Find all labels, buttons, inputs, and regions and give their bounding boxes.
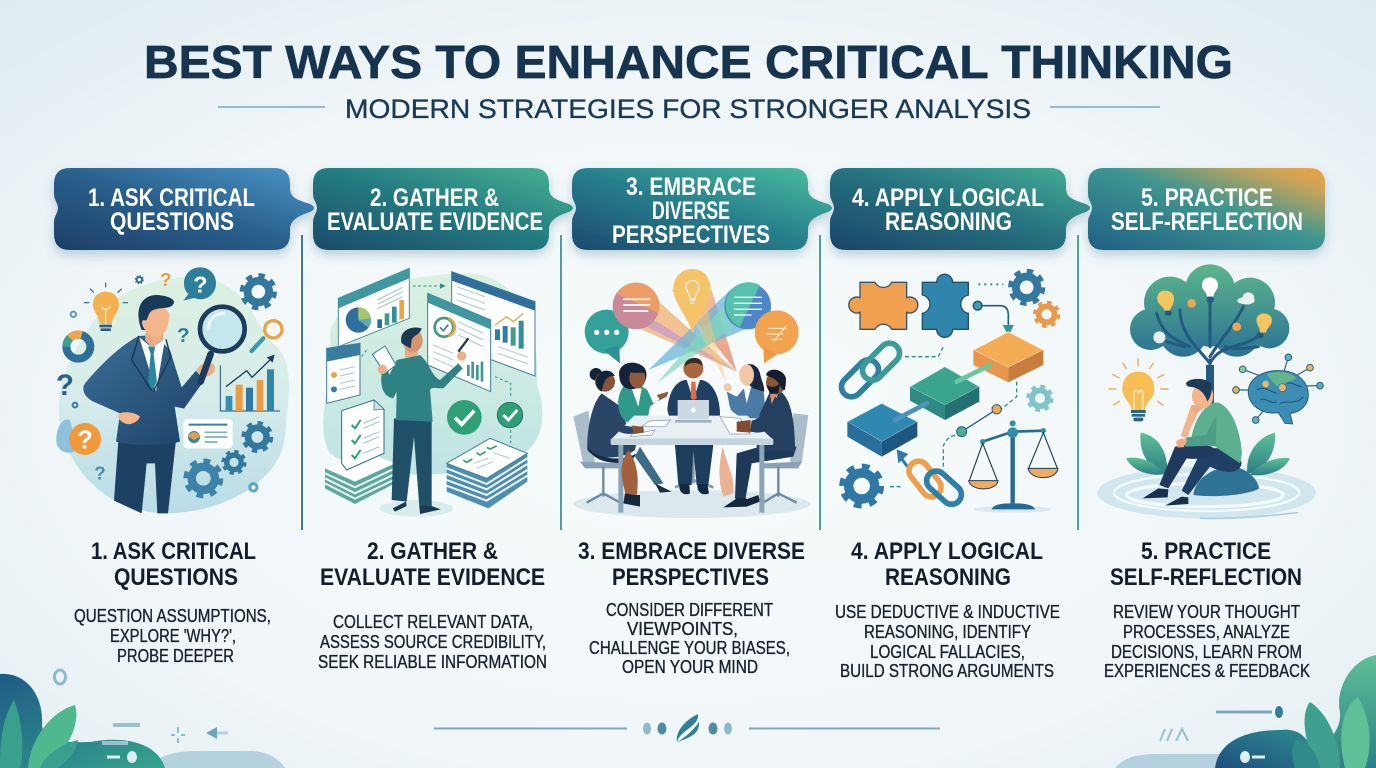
figure: businessman: [83, 295, 215, 513]
icon: gears: [842, 271, 1059, 506]
figure: man pointing at board: [372, 327, 468, 514]
header banner 3: [572, 168, 832, 250]
header banner 5: SELF-REFLECTION: [1111, 208, 1303, 236]
icon: orange puzzle piece: [849, 282, 918, 329]
step 4 text block: 4. APPLY LOGICAL: [851, 538, 1043, 565]
step 3 text block: OPEN YOUR MIND: [622, 657, 758, 677]
bar chart: [220, 355, 280, 411]
icon: scattered question marks: [56, 269, 190, 483]
subtitle: MODERN STRATEGIES FOR STRONGER ANALYSIS: [345, 94, 1031, 124]
step 4 text block: REASONING, IDENTIFY: [864, 622, 1031, 642]
figure: bearded man right: [723, 370, 797, 507]
step 4 text block: USE DEDUCTIVE & INDUCTIVE: [835, 602, 1060, 622]
illustration 3: diverse team meeting: [573, 269, 810, 518]
connector arrow: [973, 301, 1014, 336]
icon: left paper stack with checklist: [325, 400, 395, 504]
speech bubble: orange: [755, 310, 799, 363]
step 5 text block: SELF-REFLECTION: [1110, 564, 1302, 591]
block: green: [910, 365, 990, 420]
icon: magnifying glass: [200, 307, 245, 382]
dashboard window: rear chart: [452, 272, 535, 376]
step 2 text block: COLLECT RELEVANT DATA,: [333, 612, 533, 632]
step 3 text block: CHALLENGE YOUR BIASES,: [589, 638, 790, 658]
water ripples: [1097, 467, 1316, 519]
step 5 text block: [1104, 538, 1310, 681]
step 1 text block: EXPLORE 'WHY?',: [110, 626, 236, 646]
chairs: [573, 411, 808, 503]
icon: glowing bulb: [1108, 358, 1168, 421]
header banner 1: 1. ASK CRITICAL: [88, 184, 255, 212]
step 4 text block: LOGICAL FALLACIES,: [870, 642, 1025, 662]
step 3 text block: VIEWPOINTS,: [627, 619, 738, 639]
tree: [1130, 264, 1289, 405]
icon: scattered question marks: ?: [160, 269, 171, 290]
decoration: bottom right foliage: [1115, 655, 1376, 768]
step 3 text block: [578, 538, 805, 677]
icon: callout card: [183, 419, 233, 448]
icon: small orange magnifier: [252, 321, 282, 351]
dashboard window: pie and bars: [338, 268, 409, 347]
icon: orange question circle: [56, 420, 101, 455]
step 2 text block: [318, 538, 547, 672]
header banner 5: 5. PRACTICE: [1141, 184, 1273, 212]
title: BEST WAYS TO ENHANCE CRITICAL THINKING: [144, 36, 1233, 88]
icon: question bubble: ?: [193, 271, 207, 297]
illustration 1: man with magnifying glass: [56, 267, 289, 513]
header banner 2: [313, 168, 573, 250]
icon: orange question circle: ?: [77, 424, 93, 454]
dashboard window: checklist report: [428, 293, 491, 392]
step 4 text block: [835, 538, 1060, 681]
speech bubble: idea bulb: [673, 269, 711, 333]
step 5 text block: PROCESSES, ANALYZE: [1123, 622, 1290, 642]
icon: balance scale: [969, 420, 1058, 513]
step 4 text block: REASONING: [885, 564, 1011, 591]
figure: forearms and legs in front of table: [595, 397, 790, 507]
step 1 text block: PROBE DEEPER: [117, 646, 234, 666]
illustration 2: evaluating data dashboards: [323, 268, 542, 517]
table with laptop and papers: [611, 400, 773, 513]
header banner 3: PERSPECTIVES: [612, 221, 770, 249]
figure: thinking man: [1143, 379, 1242, 506]
header banner 5: [1088, 168, 1325, 250]
step 5 text block: DECISIONS, LEARN FROM: [1111, 642, 1302, 662]
dashed connectors: [890, 284, 1017, 487]
icon: orange and blue chain: [905, 457, 965, 508]
header banner 3: DIVERSE: [652, 197, 730, 225]
icon: scattered question marks: ?: [94, 462, 106, 483]
icon: scattered question marks: ?: [177, 324, 190, 347]
dashboard window: small sheet: [327, 343, 360, 403]
icon: right paper stack: [447, 438, 527, 508]
rock: [1193, 467, 1259, 496]
nodes and arrow: [897, 405, 1001, 470]
icon: gears: [135, 275, 275, 496]
step 5 text block: EXPERIENCES & FEEDBACK: [1104, 661, 1310, 681]
speech bubble: purple orange: [613, 283, 660, 329]
speech bubble: chat dots: [585, 310, 629, 363]
step 3 text block: PERSPECTIVES: [612, 564, 769, 591]
block: blue: [847, 403, 927, 457]
icon: donut chart: [66, 312, 257, 491]
step 5 text block: 5. PRACTICE: [1141, 538, 1271, 565]
figure: woman in green jacket: [618, 363, 672, 493]
step 5 text block: REVIEW YOUR THOUGHT: [1113, 602, 1300, 622]
icon: brain network: [1233, 354, 1323, 424]
header banner 1: QUESTIONS: [110, 208, 234, 236]
icon: green check badges: [447, 400, 523, 435]
figure: woman with long hair: [719, 364, 765, 497]
icon: question bubble: [183, 267, 216, 301]
colored perspective beams: [620, 287, 763, 383]
step 2 text block: SEEK RELIABLE INFORMATION: [318, 652, 547, 672]
figure: center man: [667, 358, 720, 494]
header banner 4: REASONING: [885, 208, 1012, 236]
step 1 text block: 1. ASK CRITICAL: [91, 538, 256, 565]
icon: teal chain: [837, 339, 904, 401]
step 1 text block: QUESTION ASSUMPTIONS,: [74, 606, 271, 626]
illustration 5: self reflection under idea tree: [1097, 264, 1323, 519]
block: orange: [973, 332, 1043, 382]
step 2 text block: EVALUATE EVIDENCE: [320, 564, 545, 591]
header banner 2: EVALUATE EVIDENCE: [327, 208, 543, 236]
header banner 3: 3. EMBRACE: [626, 173, 756, 201]
icon: blue puzzle piece: [922, 274, 968, 337]
speech bubble: blue green: [724, 282, 771, 329]
header banner 4: [830, 168, 1090, 250]
header banner 1: [54, 168, 314, 250]
header banner 2: 2. GATHER &: [370, 184, 499, 212]
step 4 text block: BUILD STRONG ARGUMENTS: [840, 661, 1054, 681]
step 3 text block: 3. EMBRACE DIVERSE: [578, 538, 805, 565]
step 1 text block: QUESTIONS: [114, 564, 238, 591]
step 3 text block: CONSIDER DIFFERENT: [606, 600, 773, 620]
figure: woman with bun: [587, 368, 638, 463]
step 1 text block: [74, 538, 271, 666]
decoration: bottom left foliage: [0, 670, 285, 768]
step 2 text block: 2. GATHER &: [367, 538, 498, 565]
icon: scattered question marks: ?: [56, 369, 74, 402]
icon: plants: [1126, 433, 1290, 475]
footer ornament: [434, 714, 940, 743]
icon: light bulb: [84, 283, 128, 331]
illustration 4: logical reasoning puzzle pieces and blocks: [837, 271, 1059, 513]
header banner 4: 4. APPLY LOGICAL: [852, 184, 1044, 212]
dashed connectors: [362, 283, 511, 443]
step 2 text block: ASSESS SOURCE CREDIBILITY,: [320, 632, 546, 652]
